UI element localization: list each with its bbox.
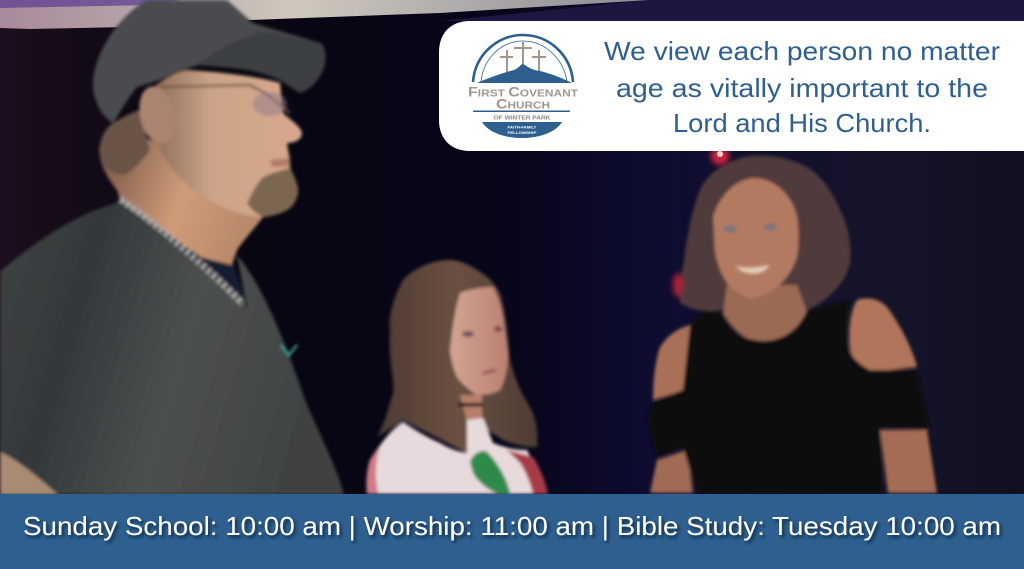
logo crosses <box>500 42 546 72</box>
man necklace <box>120 199 243 304</box>
woman eyes <box>723 226 737 232</box>
man neck <box>100 123 263 265</box>
service times text: Sunday School: 10:00 am | Worship: 11:00 am | Bible Study: Tuesday 10:00 am <box>23 511 1001 541</box>
stage light <box>673 147 729 297</box>
man cap brim <box>198 31 326 93</box>
service times bar <box>0 494 1024 569</box>
girl neck <box>460 395 482 422</box>
woman hair <box>679 155 851 311</box>
photo: woman <box>647 155 937 493</box>
man glasses <box>160 85 290 113</box>
church logo <box>468 35 578 138</box>
woman dress <box>647 300 930 493</box>
girl eye <box>462 331 474 337</box>
callout message: Lord and His Church. <box>673 108 931 138</box>
man arm <box>0 452 58 495</box>
man hair at nape <box>99 110 150 175</box>
photo: girl <box>367 260 548 495</box>
church logo: FELLOWSHIP <box>508 130 537 135</box>
girl hair <box>377 260 537 453</box>
callout message <box>604 36 1000 138</box>
woman smile <box>736 265 769 273</box>
girl shirt <box>367 418 548 494</box>
man shirt <box>0 200 344 495</box>
man ear <box>134 83 180 147</box>
callout message: age as vitally important to the <box>616 73 988 103</box>
logo inner arc <box>481 41 567 82</box>
woman left forearm <box>650 450 693 493</box>
girl face <box>450 287 508 395</box>
girl choker <box>458 403 483 406</box>
woman neck <box>723 285 807 341</box>
logo banner <box>482 122 562 138</box>
woman face <box>713 178 798 298</box>
woman left shoulder <box>653 325 690 400</box>
logo name: FIRST COVENANT <box>468 84 578 100</box>
man head <box>150 70 302 217</box>
logo hill <box>477 64 572 83</box>
man cap <box>93 0 326 123</box>
church logo: CHURCH <box>496 96 550 112</box>
logo outer arc <box>473 35 573 82</box>
shirt logo <box>281 345 297 355</box>
girl mouth <box>481 368 497 375</box>
callout panel <box>439 21 1024 151</box>
logo rule <box>473 110 570 112</box>
logo motto: FAITH-FAMILY <box>508 124 537 130</box>
logo subtitle: OF WINTER PARK <box>494 116 551 122</box>
woman right shoulder <box>849 298 917 372</box>
callout message: We view each person no matter <box>604 36 1000 66</box>
man beard <box>247 168 298 217</box>
girl shirt green print <box>470 451 511 495</box>
woman right forearm <box>880 430 937 493</box>
girl shirt red print <box>507 450 548 494</box>
man inner collar <box>198 256 248 307</box>
photo: man with cap <box>0 0 344 495</box>
